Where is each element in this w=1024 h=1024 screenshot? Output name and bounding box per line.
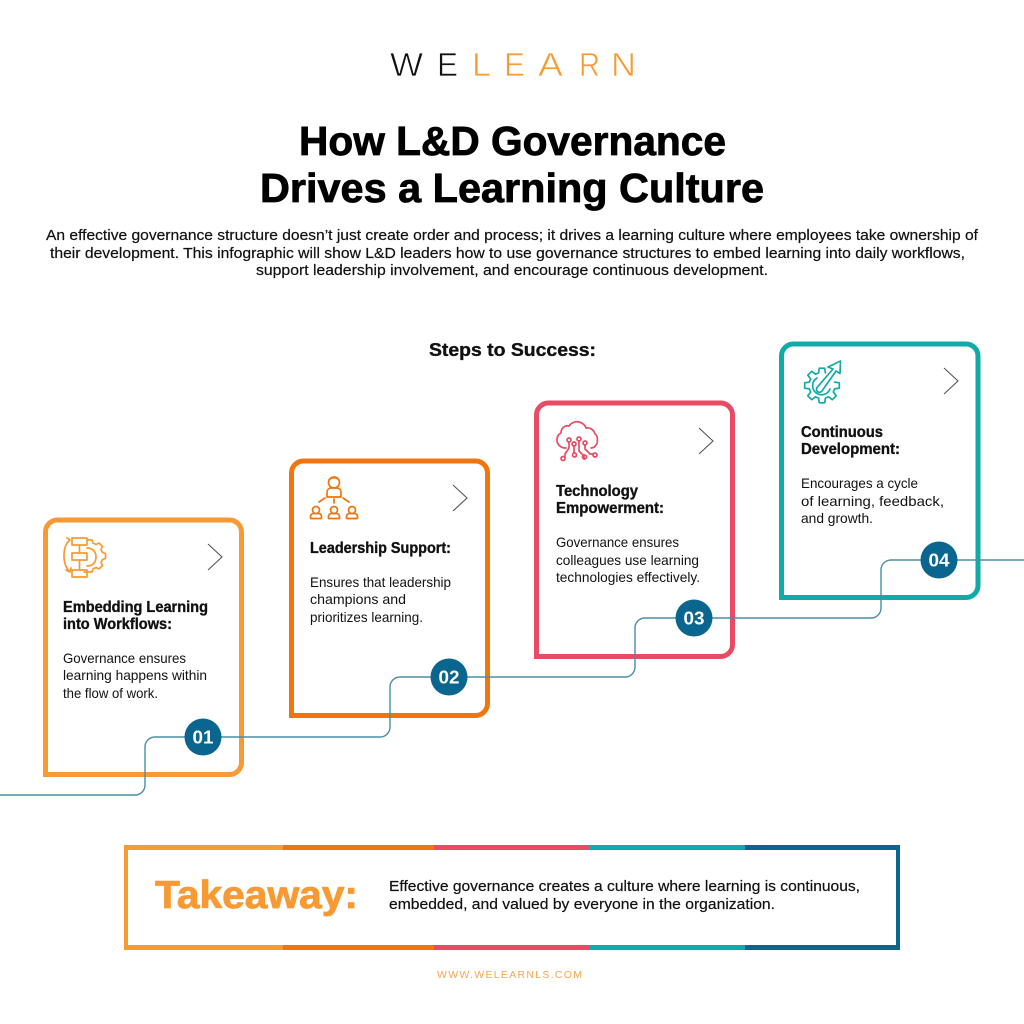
logo: WeLearn: W [390,47,423,84]
body 2: prioritizes learning. [310,609,423,625]
heading 4: Development: [801,441,900,458]
panel: step 2 leadership support [292,461,488,716]
body 4: of learning, feedback, [801,493,944,509]
timeline connector [0,560,1024,795]
arrow: chevron 1 [208,544,222,570]
heading 4 [801,424,900,458]
body 3: colleagues use learning [556,552,699,568]
panel: step 1 embedding learning [46,520,242,774]
card border 3 [536,403,732,656]
step number 01: 01 [192,728,214,748]
icon: leadership hierarchy [310,477,358,518]
title [260,118,764,211]
heading 3 [556,483,664,517]
body 1: learning happens within [63,667,207,683]
step number 02: 02 [438,668,460,688]
body 4: Encourages a cycle [801,475,918,491]
takeaway text: Effective governance creates a culture where learning is continuous, [389,879,860,895]
panel: takeaway [124,845,900,950]
body 2: champions and [310,591,406,607]
takeaway text: embedded, and valued by everyone in the organization. [389,897,775,913]
arrow: chevron 2 [453,485,467,511]
icon: workflow gear [64,538,106,577]
logo: WeLearn: R [579,47,600,84]
body 1: Governance ensures [63,650,186,666]
heading 4: Continuous [801,424,883,441]
body 3 [556,534,700,585]
intro text: support leadership involvement, and encourage continuous development. [256,263,768,279]
title: How L&D Governance [299,118,726,164]
takeaway text [389,879,860,913]
body 4: and growth. [801,510,873,526]
heading 3: Empowerment: [556,500,664,517]
body 2 [310,574,451,625]
heading 3: Technology [556,483,638,500]
logo: WeLearn: N [611,47,636,84]
intro text [46,228,979,279]
step number 01 [184,718,222,756]
step number 03 [676,600,712,636]
logo: WeLearn: L [472,47,491,84]
body 3: Governance ensures [556,534,679,550]
icon: cloud circuit [557,422,597,460]
panel: step 3 technology empowerment [536,403,732,656]
intro text: An effective governance structure doesn’t just create order and process; it drives a learning culture where employees take ownership of [46,228,979,244]
arrow: chevron 3 [699,428,713,454]
card border 2 [292,461,488,716]
heading 1: Embedding Learning [63,599,208,616]
intro text: their development. This infographic will show L&D leaders how to use governance structures to embed learning into daily workflows, [50,246,965,262]
body 1: the flow of work. [63,685,158,701]
arrow: chevron 4 [944,368,958,394]
body 4 [801,475,944,526]
body 2: Ensures that leadership [310,574,451,590]
step number 04 [920,542,958,578]
body 3: technologies effectively. [556,569,700,585]
footer url: WWW.WELEARNLS.COM [437,969,582,981]
logo: WeLearn: E [504,47,525,84]
multicolour border [124,845,900,950]
icon: gear with arrow [805,361,840,403]
step number 03: 03 [684,608,704,628]
logo: WeLearn: A [538,47,564,84]
panel: step 4 continuous development [782,344,978,598]
heading 1: into Workflows: [63,616,172,633]
step number 04: 04 [928,550,950,570]
card border 4 [782,344,978,598]
title: Drives a Learning Culture [260,165,764,211]
body 1 [63,650,207,701]
card border 1 [46,520,242,774]
logo: WeLearn [390,47,636,84]
step number 02 [430,658,468,696]
heading 1 [63,599,208,633]
heading: steps to success: Steps to Success: [429,339,596,360]
logo: WeLearn: E [437,47,458,84]
heading 2: Leadership Support: [310,540,451,557]
takeaway label: Takeaway: [155,874,358,917]
